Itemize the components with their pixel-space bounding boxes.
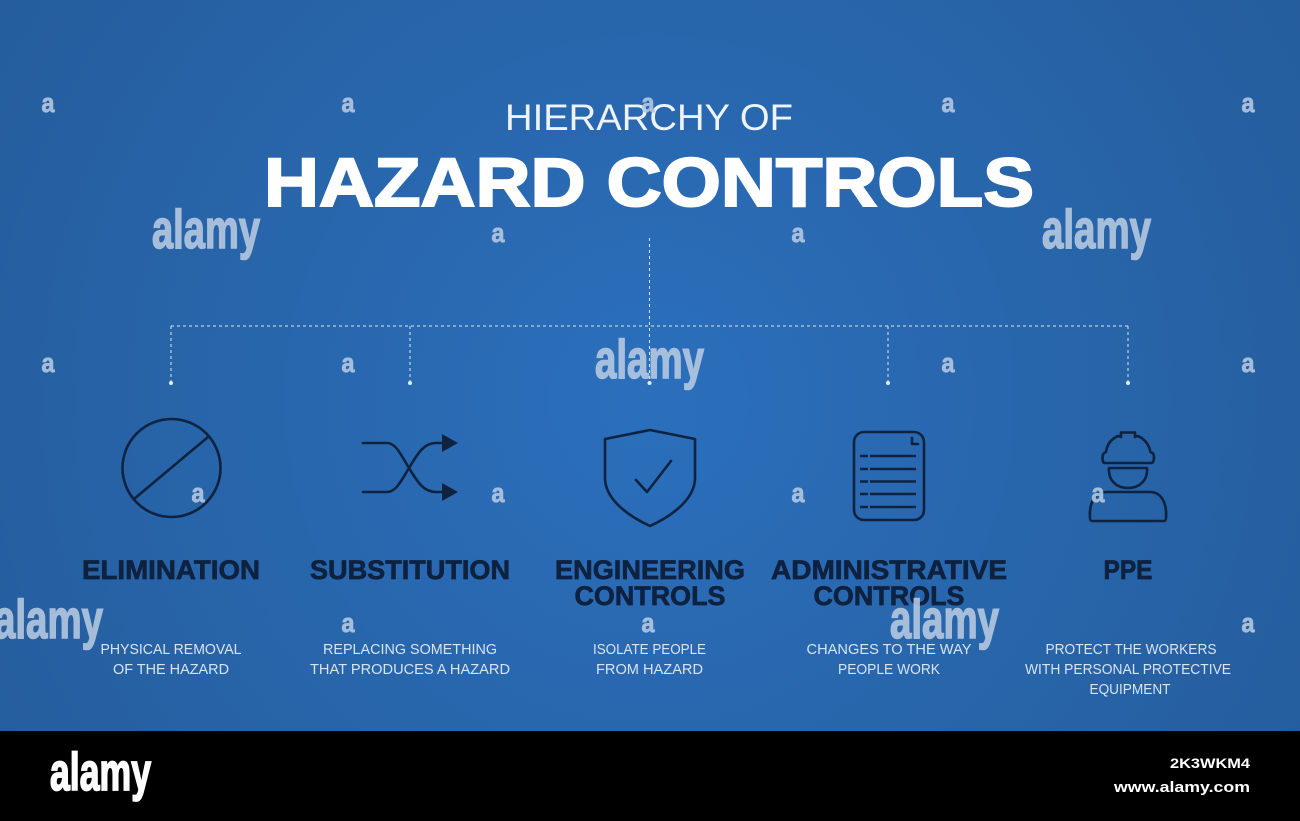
- watermark: large alamy marks: alamy: [890, 588, 999, 650]
- description: elimination: OF THE HAZARD: [113, 661, 229, 678]
- watermark: small a marks: a: [492, 218, 505, 248]
- heading: substitution: SUBSTITUTION: [310, 555, 510, 585]
- watermark: small a marks: a: [1242, 348, 1255, 378]
- description: engineering controls: FROM HAZARD: [596, 661, 703, 678]
- watermark: small a marks: a: [792, 218, 805, 248]
- heading: engineering controls: [555, 555, 745, 611]
- heading: engineering controls: ENGINEERING: [555, 555, 745, 585]
- watermark: small a marks: a: [42, 88, 55, 118]
- black footer bar: [0, 731, 1300, 821]
- watermark: large alamy marks: alamy: [1042, 198, 1151, 260]
- icon: worker with hard hat: [1090, 432, 1166, 521]
- footer image id and url: [1113, 755, 1250, 796]
- footer logo: alamy: alamy: [50, 743, 151, 802]
- title: [264, 97, 1034, 221]
- description: ppe: EQUIPMENT: [1090, 681, 1170, 698]
- column: elimination: [82, 419, 260, 678]
- description: administrative controls: [806, 641, 972, 678]
- watermark: small a marks: a: [642, 608, 655, 638]
- dotted connector tree: [169, 238, 1130, 385]
- footer image id and url: www.alamy.com: [1113, 779, 1250, 796]
- watermark: small a marks: a: [342, 608, 355, 638]
- watermark: small a marks: a: [1092, 478, 1105, 508]
- heading: administrative controls: CONTROLS: [814, 581, 964, 611]
- watermark: small a marks: a: [942, 348, 955, 378]
- description: substitution: REPLACING SOMETHING: [323, 641, 497, 658]
- heading: administrative controls: [771, 555, 1007, 611]
- description: ppe: [1025, 641, 1231, 698]
- column: engineering controls: [555, 430, 745, 678]
- watermark: small a marks: a: [192, 478, 205, 508]
- icon: document: [854, 432, 924, 520]
- title: HAZARD CONTROLS: [264, 144, 1034, 221]
- watermark: small a marks: a: [342, 348, 355, 378]
- icon: shield with check: [605, 430, 695, 526]
- footer image id and url: 2K3WKM4: [1170, 755, 1250, 771]
- description: administrative controls: PEOPLE WORK: [838, 661, 940, 678]
- watermark: small a marks: [42, 88, 1255, 638]
- heading: administrative controls: ADMINISTRATIVE: [771, 555, 1007, 585]
- watermark: small a marks: a: [492, 478, 505, 508]
- watermark: small a marks: a: [942, 88, 955, 118]
- description: substitution: [310, 641, 510, 678]
- watermark: small a marks: a: [342, 88, 355, 118]
- watermark: small a marks: a: [1242, 608, 1255, 638]
- description: elimination: PHYSICAL REMOVAL: [100, 641, 242, 658]
- watermark: large alamy marks: alamy: [595, 328, 704, 390]
- icon: crossing arrows: [363, 434, 458, 501]
- column: administrative controls: [771, 432, 1007, 678]
- description: ppe: WITH PERSONAL PROTECTIVE: [1025, 661, 1231, 678]
- watermark: small a marks: a: [1242, 88, 1255, 118]
- description: substitution: THAT PRODUCES A HAZARD: [310, 661, 510, 678]
- description: ppe: PROTECT THE WORKERS: [1046, 641, 1216, 658]
- heading: engineering controls: CONTROLS: [574, 581, 726, 611]
- column: ppe: [1025, 432, 1231, 698]
- watermark: small a marks: a: [42, 348, 55, 378]
- icon: prohibition circle: [122, 419, 220, 517]
- description: engineering controls: ISOLATE PEOPLE: [593, 641, 706, 658]
- watermark: small a marks: a: [792, 478, 805, 508]
- description: elimination: [100, 641, 242, 678]
- description: administrative controls: CHANGES TO THE WAY: [806, 641, 972, 658]
- watermark: large alamy marks: [0, 198, 1151, 650]
- description: engineering controls: [593, 641, 706, 678]
- watermark: large alamy marks: alamy: [152, 198, 260, 260]
- heading: elimination: ELIMINATION: [82, 555, 260, 585]
- column: substitution: [310, 434, 510, 678]
- watermark: small a marks: a: [642, 88, 655, 118]
- title: HIERARCHY OF: [505, 97, 793, 138]
- heading: ppe: PPE: [1104, 555, 1152, 585]
